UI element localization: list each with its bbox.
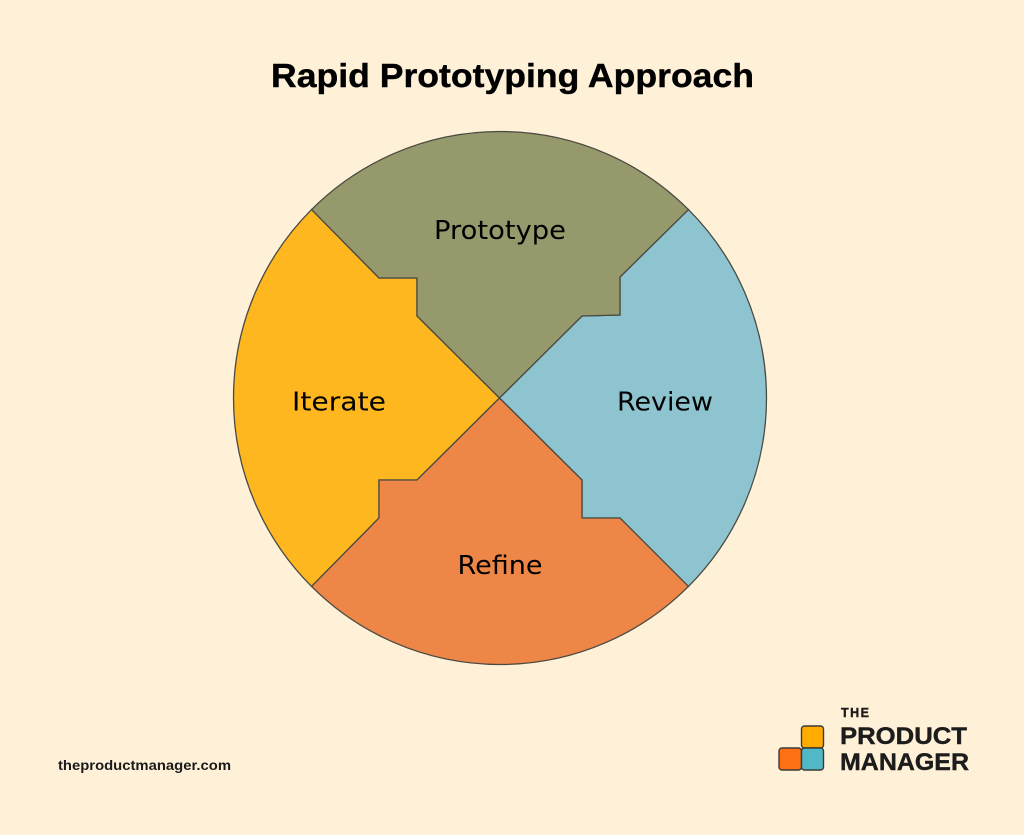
segment: Prototype [312,132,688,398]
segment: Review [500,210,766,586]
logo wordmark: PRODUCT [840,723,967,750]
title: Rapid Prototyping Approach [271,57,754,94]
segment: Refine [312,398,688,664]
cycle diagram [234,132,766,664]
segment: Iterate [234,210,499,586]
segment: Review: Review [617,388,713,418]
logo wordmark: MANAGER [840,749,969,776]
segment: Prototype: Prototype [434,216,566,246]
segment: Refine: Refine [458,551,542,581]
segment: Iterate: Iterate [292,388,386,418]
logo: The Product Manager [779,706,969,776]
logo icon: squares [779,726,824,770]
logo wordmark: THE [841,706,869,720]
logo wordmark [840,706,969,776]
website url: theproductmanager.com [58,758,231,773]
